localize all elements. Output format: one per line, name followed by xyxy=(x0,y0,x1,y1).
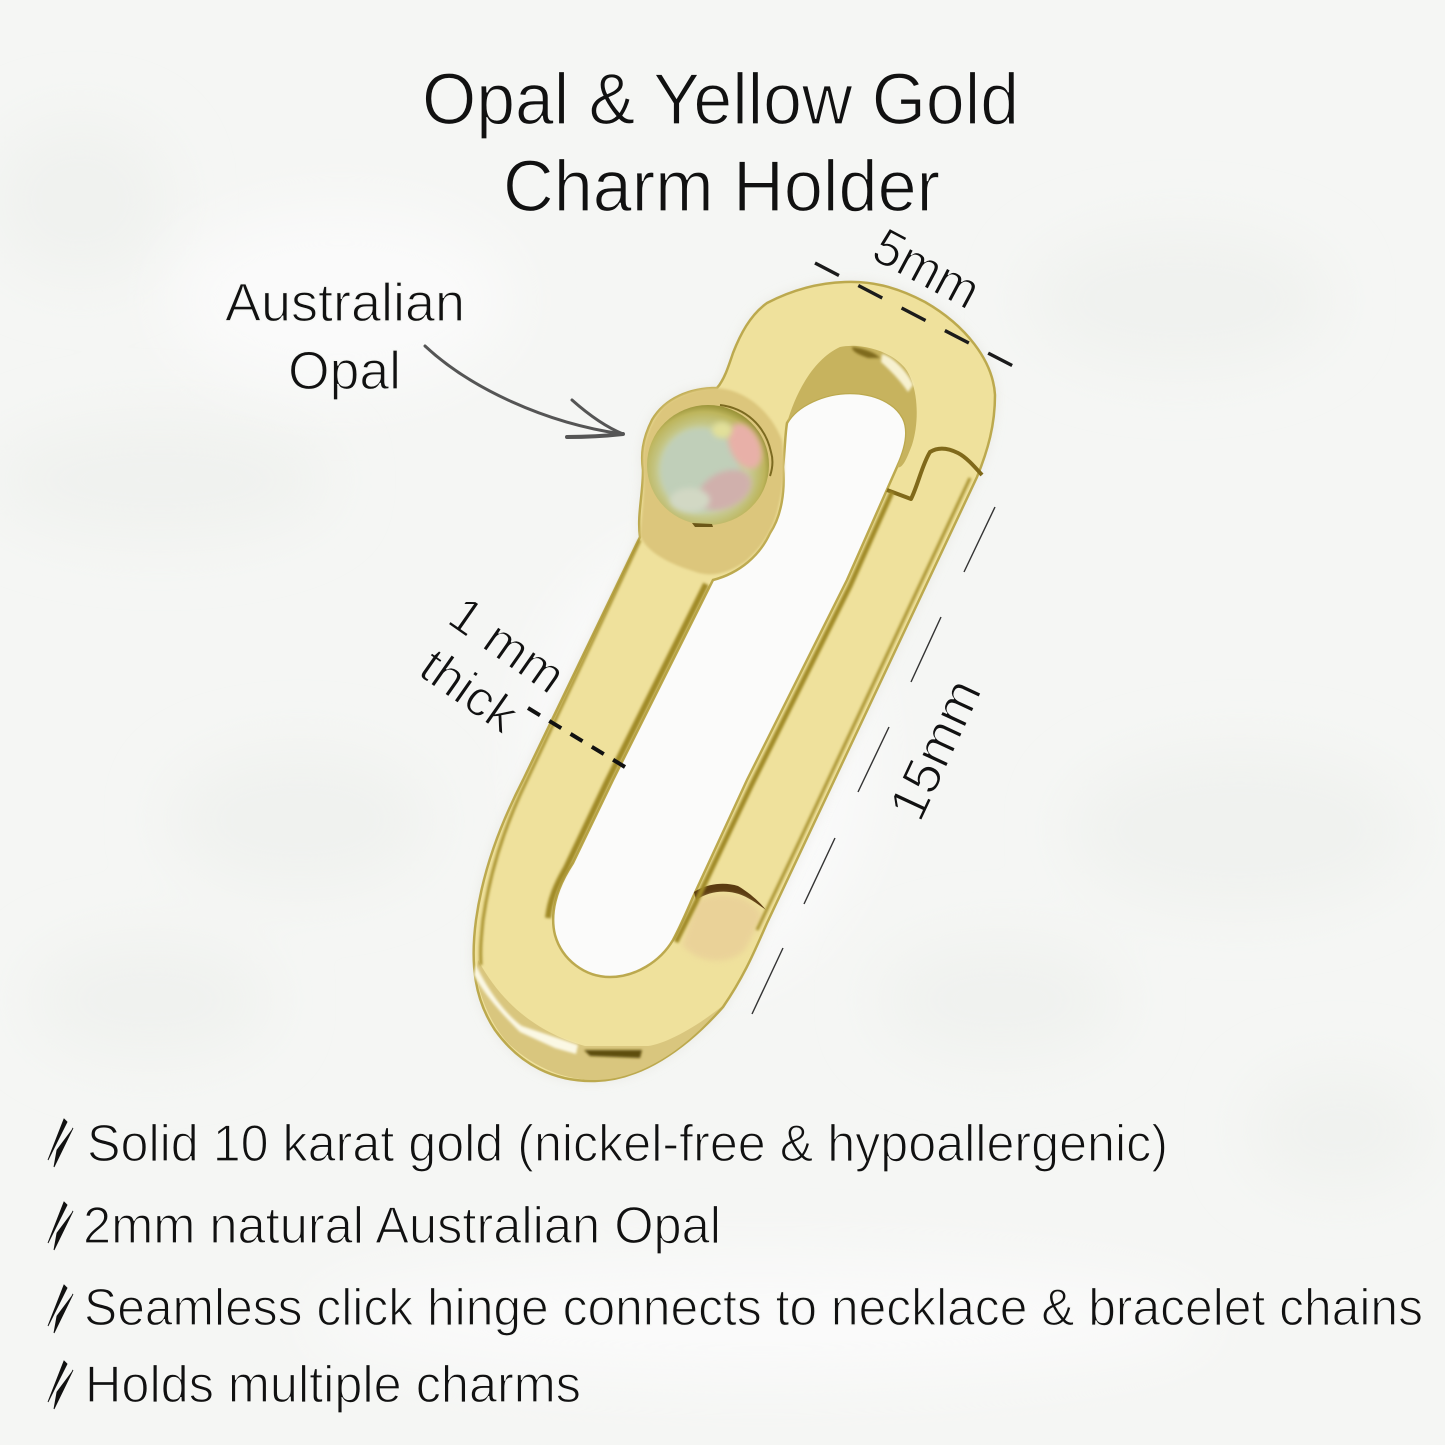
hinge seam top xyxy=(887,449,982,499)
thickness label: 1 mm xyxy=(439,585,576,704)
soft shadow xyxy=(474,282,995,1081)
clasp body xyxy=(474,282,995,1081)
thickness dimension line xyxy=(528,708,625,767)
inner edge shading right arm xyxy=(676,492,892,942)
thickness label: thick xyxy=(410,637,529,744)
bezel dark edge xyxy=(720,405,773,476)
callout label: Australian Opal: Opal xyxy=(288,341,401,401)
bottom rim xyxy=(476,960,721,1080)
outer edge shading right xyxy=(757,478,970,930)
width dimension line: 5mm xyxy=(815,263,1013,366)
highlight inside top arc xyxy=(881,354,913,392)
rosy tip of arm xyxy=(682,895,762,961)
arrow pointing to opal xyxy=(425,346,623,437)
bezel xyxy=(640,388,784,574)
width label: 5mm: 5mm xyxy=(863,217,990,321)
bottom rim highlight xyxy=(474,965,578,1054)
bottom dark glint xyxy=(584,1050,642,1058)
bullet 4: Holds multiple charms xyxy=(85,1356,581,1414)
opal stone xyxy=(647,405,769,527)
title: Charm Holder xyxy=(503,147,940,227)
gold charm holder xyxy=(474,282,995,1081)
bullet 1: Solid 10 karat gold (nickel-free & hypoallergenic) xyxy=(87,1115,1168,1173)
callout label: Australian Opal xyxy=(225,273,465,401)
dark reflection inside top arc xyxy=(852,347,880,358)
title: Opal & Yellow Gold xyxy=(422,60,1019,140)
wall inside top arc xyxy=(787,346,917,467)
callout label: Australian Opal: Australian xyxy=(225,273,465,333)
bullet list xyxy=(48,1115,1423,1414)
thickness label xyxy=(410,585,576,744)
bullet 3: Seamless click hinge connects to necklace & bracelet chains xyxy=(84,1279,1423,1337)
hinge seam bottom xyxy=(694,884,766,910)
title xyxy=(422,60,1019,227)
inner edge shading left arm xyxy=(548,584,706,918)
length dimension line xyxy=(752,507,995,1014)
bullet 2: 2mm natural Australian Opal xyxy=(83,1197,721,1255)
hole fill xyxy=(553,393,906,977)
outer edge shading xyxy=(481,540,640,965)
length label: 15mm: 15mm xyxy=(878,670,993,829)
